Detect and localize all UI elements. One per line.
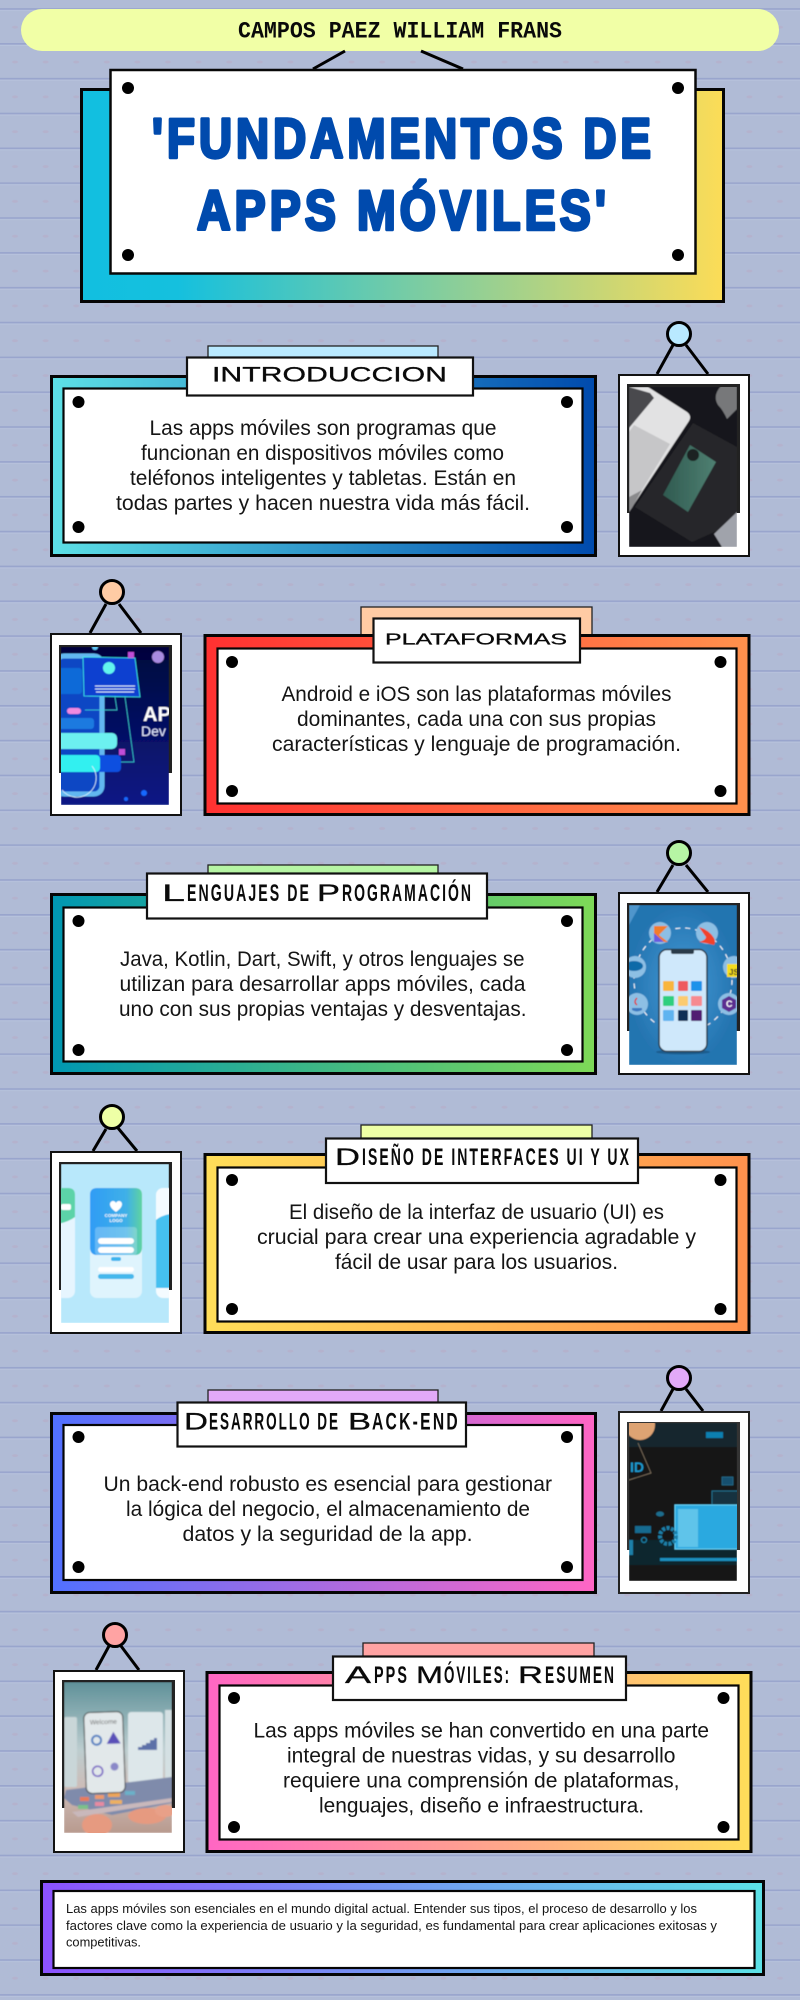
text: desarrollo de back-end: datos y la seguridad de la app. — [182, 1523, 472, 1546]
heading: introduccion: INTRODUCCION — [212, 364, 447, 386]
text: apps moviles resumen: Las apps móviles se han convertido en una parte — [254, 1720, 709, 1742]
main title — [152, 106, 655, 242]
panel: introduccion — [52, 346, 596, 556]
photo: hand holding phone: Welcome — [90, 1719, 117, 1727]
text: plataformas: características y lenguaje de programación. — [272, 733, 681, 756]
photo: programming languages: C — [726, 999, 733, 1009]
panel: plataformas — [205, 607, 749, 814]
photo: back-end development: ID — [630, 1459, 644, 1475]
heading: diseno de interfaces: D — [335, 1144, 360, 1171]
photo: mobile ui screens: LOGO — [109, 1218, 123, 1223]
heading: plataformas — [374, 618, 580, 662]
heading: apps moviles resumen: ÓVILES: — [444, 1661, 511, 1689]
text: plataformas: Android e iOS son las plataformas móviles — [282, 683, 672, 706]
photo: hand holding phone — [54, 1624, 184, 1852]
author name pill: CAMPOS PAEZ WILLIAM FRANS — [238, 18, 562, 44]
heading: desarrollo de back-end: D — [184, 1408, 208, 1436]
photo: app development: AP — [143, 704, 171, 726]
text: lenguajes de programacion — [119, 948, 526, 1021]
text: introduccion: teléfonos inteligentes y tabletas. Están en — [130, 467, 516, 490]
author name pill — [21, 9, 779, 51]
heading: desarrollo de back-end: ESARROLLO DE — [209, 1408, 340, 1436]
main title: APPS MÓVILES' — [197, 178, 610, 242]
text: conclusion: factores clave como la experiencia de usuario y la seguridad, es fundamental para crear aplicaciones exitosas y — [66, 1918, 717, 1933]
text: apps moviles resumen: integral de nuestras vidas, y su desarrollo — [287, 1744, 676, 1768]
photo: back-end development — [619, 1366, 749, 1593]
photo: phone on laptop — [619, 322, 749, 556]
text: plataformas: dominantes, cada una con sus propias — [297, 708, 656, 731]
heading: desarrollo de back-end: ACK-END — [372, 1408, 460, 1436]
panel: diseno de interfaces — [205, 1125, 749, 1332]
heading: plataformas: PLATAFORMAS — [385, 632, 567, 648]
text: diseno de interfaces: El diseño de la interfaz de usuario (UI) es — [289, 1201, 664, 1224]
text: plataformas — [272, 683, 681, 756]
heading: apps moviles resumen: ESUMEN — [545, 1662, 616, 1689]
text: apps moviles resumen: requiere una comprensión de plataformas, — [283, 1770, 680, 1792]
heading: apps moviles resumen: R — [518, 1662, 543, 1689]
text: introduccion: Las apps móviles son programas que — [150, 417, 496, 440]
text: desarrollo de back-end: la lógica del negocio, el almacenamiento de — [126, 1498, 530, 1521]
text: introduccion: funcionan en dispositivos móviles como — [141, 442, 504, 465]
title board — [82, 51, 724, 302]
heading: lenguajes de programacion: P — [317, 880, 340, 907]
panel: apps moviles resumen — [207, 1643, 751, 1852]
panel: desarrollo de back-end — [52, 1390, 596, 1592]
panel: lenguajes de programacion — [52, 865, 596, 1074]
text: lenguajes de programacion: utilizan para desarrollar apps móviles, cada — [120, 973, 526, 996]
text: desarrollo de back-end: Un back-end robusto es esencial para gestionar — [104, 1473, 552, 1496]
photo: programming languages — [619, 842, 749, 1074]
heading: introduccion — [187, 358, 473, 396]
heading: lenguajes de programacion: L — [162, 880, 185, 907]
text: diseno de interfaces — [257, 1201, 697, 1274]
text: diseno de interfaces: crucial para crear una experiencia agradable y — [257, 1226, 697, 1249]
heading: desarrollo de back-end: B — [348, 1408, 371, 1436]
heading: lenguajes de programacion — [147, 874, 487, 918]
text: conclusion: competitivas. — [66, 1934, 141, 1950]
text: lenguajes de programacion: uno con sus propias ventajas y desventajas. — [119, 998, 526, 1021]
text: diseno de interfaces: fácil de usar para los usuarios. — [335, 1251, 618, 1274]
photo: mobile ui screens — [51, 1106, 181, 1333]
heading: apps moviles resumen — [333, 1656, 626, 1700]
heading: lenguajes de programacion: ENGUAJES DE — [187, 880, 311, 907]
main title: 'FUNDAMENTOS DE — [152, 106, 655, 170]
text: apps moviles resumen: lenguajes, diseño e infraestructura. — [319, 1794, 644, 1818]
panel: conclusion — [42, 1882, 764, 1974]
text: conclusion: Las apps móviles son esenciales en el mundo digital actual. Entender sus tipos, el proceso de desarrollo y los — [66, 1901, 697, 1916]
heading: diseno de interfaces — [326, 1138, 638, 1183]
text: introduccion: todas partes y hacen nuestra vida más fácil. — [116, 492, 530, 515]
photo: app development: Dev — [141, 723, 166, 739]
heading: apps moviles resumen: A — [345, 1662, 371, 1689]
heading: desarrollo de back-end — [178, 1402, 466, 1446]
photo: app development — [51, 580, 181, 815]
photo: mobile ui screens: COMPANY — [105, 1213, 127, 1218]
heading: lenguajes de programacion: ROGRAMACIÓN — [342, 879, 473, 907]
heading: apps moviles resumen: M — [416, 1662, 443, 1689]
text: introduccion — [116, 417, 530, 515]
text: desarrollo de back-end — [104, 1473, 552, 1546]
text: apps moviles resumen — [254, 1720, 709, 1818]
heading: apps moviles resumen: PPS — [374, 1662, 409, 1689]
text: lenguajes de programacion: Java, Kotlin, Dart, Swift, y otros lenguajes se — [120, 948, 524, 971]
photo: programming languages: JS — [729, 968, 739, 977]
text: conclusion — [66, 1901, 717, 1950]
